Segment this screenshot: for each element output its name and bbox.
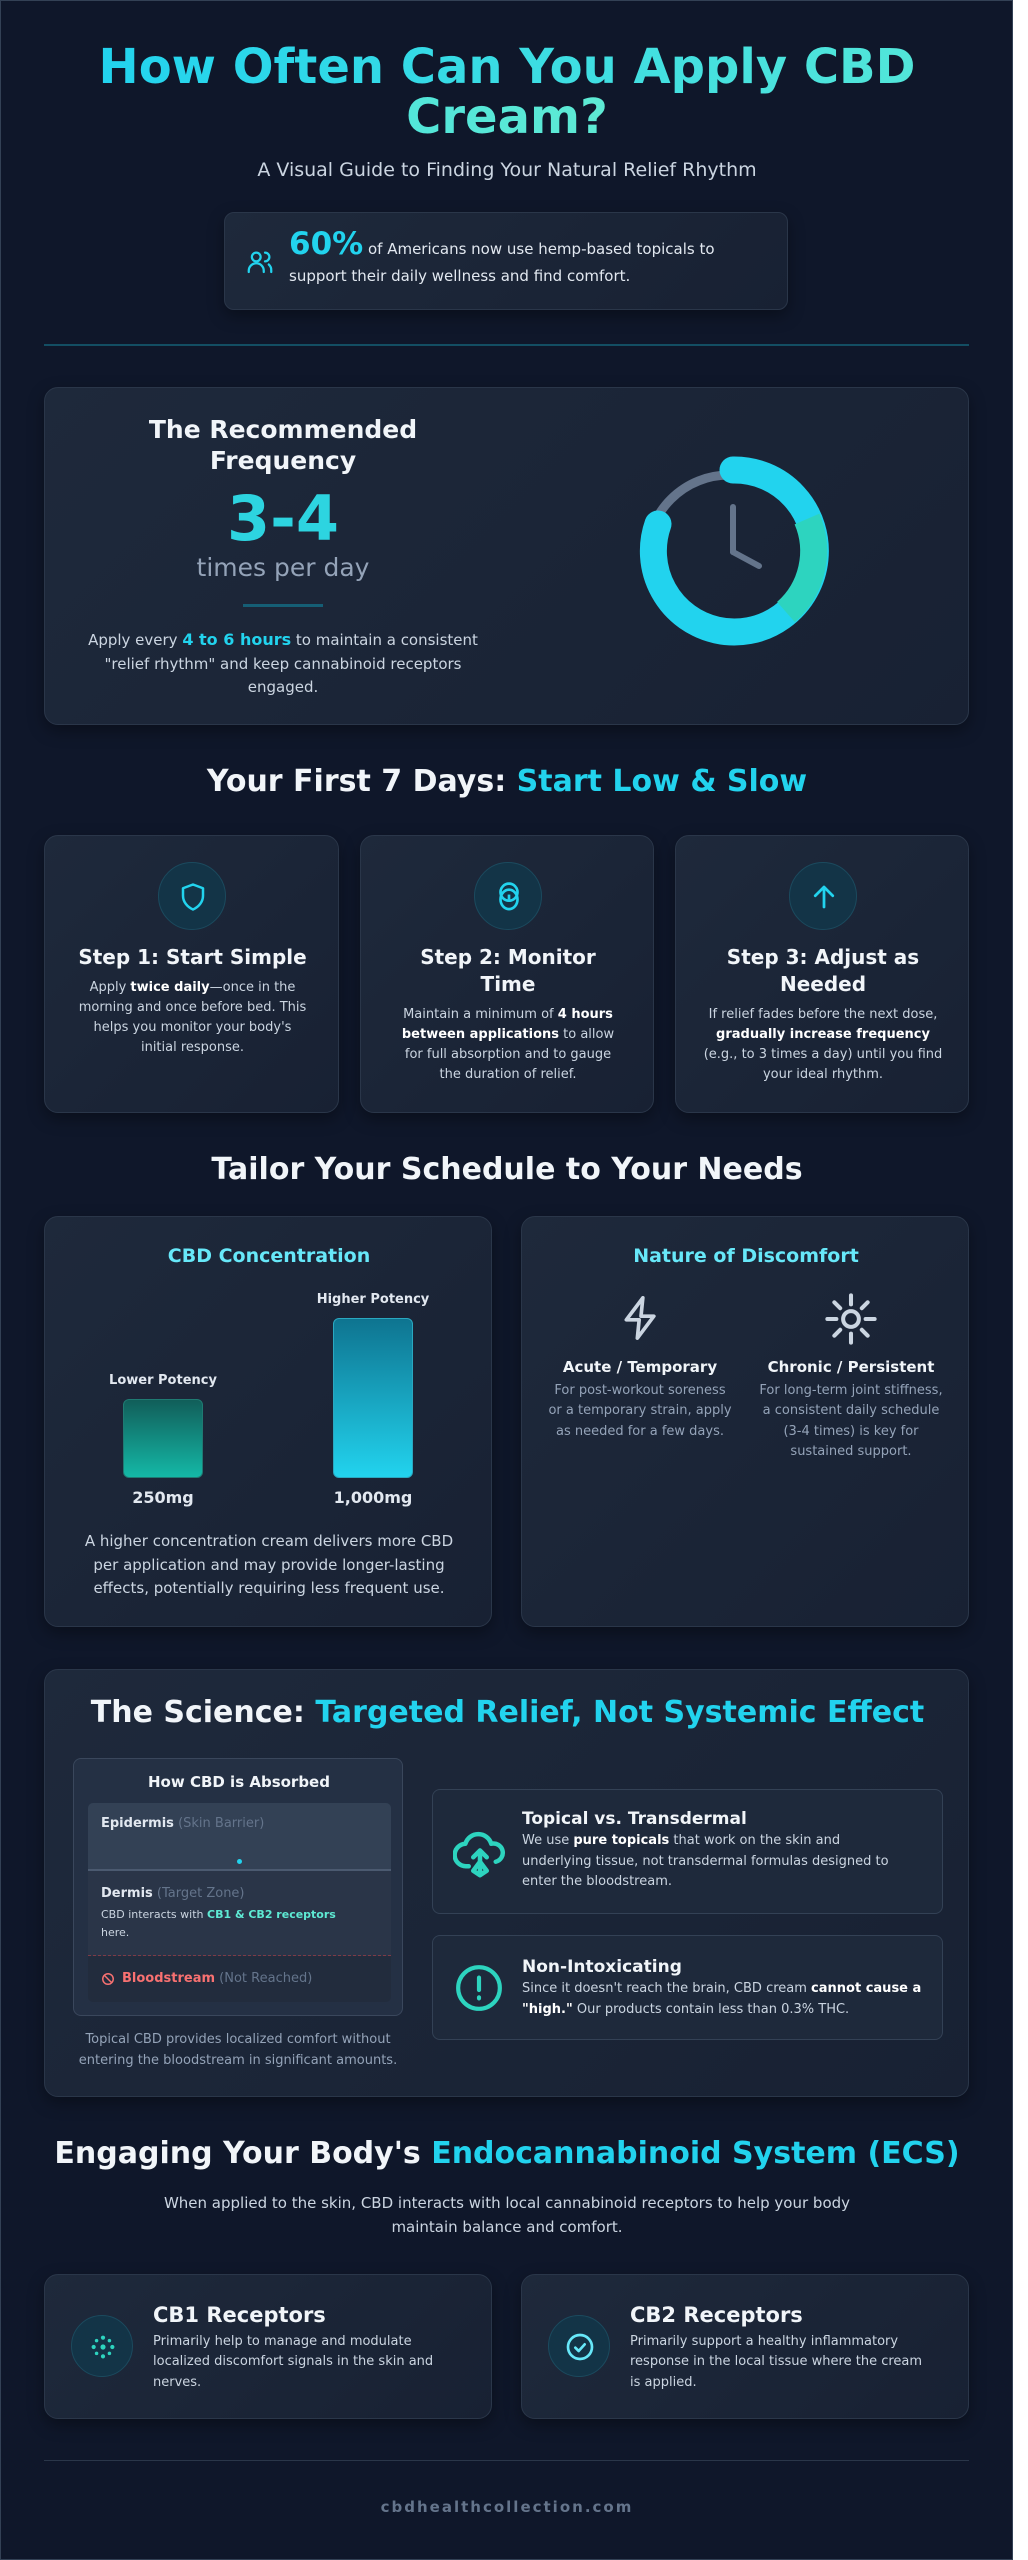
step title: Step 1: Start Simple <box>78 945 307 969</box>
layer: bloodstream: Bloodstream (Not Reached) <box>122 1971 312 1986</box>
title <box>99 39 915 145</box>
card: CB1 <box>44 2274 492 2419</box>
icon: alert circle <box>456 1965 502 2011</box>
step title: Time <box>481 972 535 996</box>
layer: epidermis: Epidermis (Skin Barrier) <box>101 1816 264 1831</box>
column: acute: Acute / Temporary <box>563 1358 717 1376</box>
step 2 card <box>360 835 654 1113</box>
icon: CB1 dots <box>71 2315 133 2377</box>
step title <box>727 945 919 996</box>
description: Apply every 4 to 6 hours to maintain a consistent "relief rhythm" and keep cannabinoid receptors engaged. <box>88 630 478 696</box>
ECS intro text: When applied to the skin, CBD interacts with local cannabinoid receptors to help your body maintain balance and comfort. <box>164 2194 850 2236</box>
heading: ECS: Engaging Your Body's Endocannabinoid System (ECS) <box>54 2136 960 2171</box>
bar chart: 1,000mg <box>334 1488 412 1507</box>
layer: epidermis <box>88 1803 391 1871</box>
heading: Frequency <box>210 446 356 475</box>
diagram caption: Topical CBD provides localized comfort without entering the bloodstream in significant amounts. <box>79 2032 397 2068</box>
panel title: CBD Concentration <box>168 1245 370 1267</box>
bar chart: 250mg <box>132 1488 194 1507</box>
step text: Maintain a minimum of 4 hours between applications to allow for full absorption and to gauge the duration of relief. <box>402 1007 614 1082</box>
layer: dermis <box>88 1871 391 1956</box>
card: CB2 <box>521 2274 969 2419</box>
times per day: times per day <box>197 553 369 582</box>
column: chronic: Chronic / Persistent <box>768 1358 934 1376</box>
icon: people <box>248 252 272 274</box>
card: non-intoxicating: Since it doesn't reach the brain, CBD cream cannot cause a "high." Our products contain less than 0.3% THC. <box>522 1981 921 2016</box>
step text: Apply twice daily—once in the morning and once before bed. This helps you monitor your body's initial response. <box>79 980 306 1055</box>
column: acute: For post-workout soreness or a temporary strain, apply as needed for a few days. <box>548 1383 732 1439</box>
subtitle: A Visual Guide to Finding Your Natural Relief Rhythm <box>257 159 757 181</box>
absorption diagram: How CBD is Absorbed <box>148 1773 330 1791</box>
icon: lightning <box>624 1296 656 1340</box>
title: Cream? <box>406 89 608 145</box>
bar chart <box>109 1292 429 1507</box>
CB1 text: Primarily help to manage and modulate localized discomfort signals in the skin and nerves. <box>153 2334 433 2390</box>
icon: shield <box>158 862 226 930</box>
science title: The Science: Targeted Relief, Not Systemic Effect <box>91 1695 924 1730</box>
heading: first 7 days: Your First 7 Days: Start Low & Slow <box>207 764 807 799</box>
icon: clock ring <box>640 456 829 646</box>
concentration text: A higher concentration cream delivers more CBD per application and may provide longer-lasting effects, potentially requiring less frequent use. <box>85 1532 453 1597</box>
column: acute <box>548 1296 732 1439</box>
layer: dermis: Dermis (Target Zone) <box>101 1886 244 1901</box>
icon: cloud upload <box>453 1832 506 1878</box>
icon: CB2 check <box>548 2315 610 2377</box>
icon: timer <box>474 862 542 930</box>
card: topical vs transdermal: Topical vs. Transdermal <box>522 1809 747 1829</box>
heading <box>149 415 417 475</box>
stat box <box>224 212 788 310</box>
bar chart: Higher Potency <box>317 1292 429 1307</box>
step 3 card <box>675 835 969 1113</box>
icon: arrow up <box>789 862 857 930</box>
footer: cbdhealthcollection.com <box>381 2498 633 2516</box>
CB2 text: Primarily support a healthy inflammatory response in the local tissue where the cream is applied. <box>630 2334 922 2390</box>
CB1 title: CB1 Receptors <box>153 2303 326 2327</box>
step title: Needed <box>780 972 866 996</box>
absorption diagram <box>73 1758 403 2016</box>
layer: bloodstream <box>88 1956 391 2002</box>
card: topical vs transdermal: We use pure topicals that work on the skin and underlying tissue, not transdermal formulas designed to enter the bloodstream. <box>522 1833 889 1889</box>
step text: If relief fades before the next dose, gradually increase frequency (e.g., to 3 times a day) until you find your ideal rhythm. <box>704 1007 942 1082</box>
card: non-intoxicating <box>432 1935 943 2040</box>
heading: The Recommended <box>149 415 417 444</box>
layer: dermis: CBD interacts with CB1 & CB2 receptors here. <box>101 1908 336 1938</box>
heading: tailor: Tailor Your Schedule to Your Needs <box>211 1152 803 1187</box>
panel: recommended frequency <box>44 387 969 725</box>
icon: sun <box>825 1293 877 1345</box>
panel: nature of discomfort <box>521 1216 969 1627</box>
big number: 3-4 <box>227 482 339 555</box>
panel: CBD concentration <box>44 1216 492 1627</box>
column: chronic <box>759 1293 943 1459</box>
step title: Step 2: Monitor <box>420 945 596 969</box>
step 1 card <box>44 835 339 1113</box>
bar chart: Lower Potency <box>109 1373 217 1388</box>
card: non-intoxicating: Non-Intoxicating <box>522 1957 682 1977</box>
column: chronic: For long-term joint stiffness, a consistent daily schedule (3-4 times) is key for sustained support. <box>759 1383 943 1459</box>
panel: the science <box>44 1669 969 2097</box>
panel title: Nature of Discomfort <box>633 1245 859 1267</box>
step title <box>420 945 596 996</box>
CB2 title: CB2 Receptors <box>630 2303 803 2327</box>
stat text: 60% of Americans now use hemp-based topicals to support their daily wellness and find comfort. <box>289 226 715 285</box>
card: topical vs transdermal <box>432 1789 943 1914</box>
step title: Step 3: Adjust as <box>727 945 919 969</box>
title: How Often Can You Apply CBD <box>99 39 915 95</box>
